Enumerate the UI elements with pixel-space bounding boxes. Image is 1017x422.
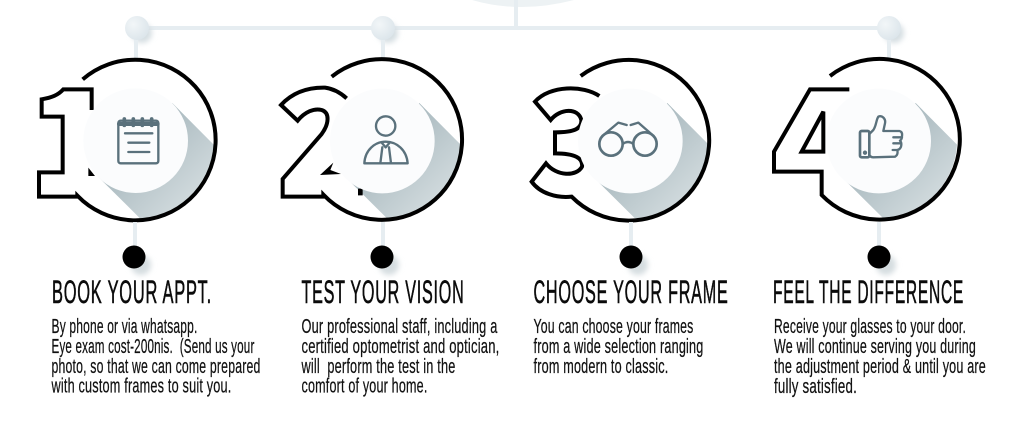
heading: test your vision: TEST YOUR VISION <box>302 274 464 310</box>
text: step 2 description <box>301 316 500 398</box>
inner disc <box>83 88 188 193</box>
step 2 badge <box>281 59 462 220</box>
step 1 badge <box>39 60 216 220</box>
step 3 badge <box>532 60 709 221</box>
marker: step 3 dot <box>620 222 648 275</box>
numeral inner detail <box>320 163 363 195</box>
text: step 4 description: fully satisfied. <box>774 376 857 398</box>
numeral inner triangle <box>802 112 823 152</box>
outer ring and numeral 2 <box>281 59 462 220</box>
text: step 2 description: certified optometrist and optician, <box>302 336 500 358</box>
text: step 1 description: photo, so that we can come prepared <box>52 356 260 378</box>
text: step 3 description: from a wide selection ranging <box>534 336 704 358</box>
marker: step 4 dot <box>868 222 896 275</box>
text: step 1 description: Eye exam cost-200nis. (Send us your <box>52 336 255 358</box>
inner disc <box>826 89 931 193</box>
long shadow <box>98 103 214 218</box>
top decorative connector <box>137 0 889 30</box>
text: step 3 description: from modern to classic. <box>534 356 668 378</box>
icon: notepad <box>118 119 158 163</box>
long shadow <box>842 103 957 218</box>
text: step 2 description: comfort of your home. <box>302 376 428 398</box>
outer ring and numeral 4 <box>774 59 960 220</box>
text: step 1 description: with custom frames to suit you. <box>51 376 232 398</box>
outer ring and numeral 3 <box>532 60 709 221</box>
text: step 2 description: Our professional staff, including a <box>302 316 498 338</box>
long shadow <box>345 103 461 218</box>
inner disc <box>578 89 683 193</box>
heading: choose your frame: CHOOSE YOUR FRAME <box>534 274 728 310</box>
text: step 1 description: By phone or via whatsapp. <box>52 316 198 338</box>
node: step 4 connector <box>877 16 904 58</box>
text: step 3 description <box>534 316 704 378</box>
marker: step 2 dot <box>370 222 399 275</box>
text: step 3 description: You can choose your frames <box>534 316 694 338</box>
icon: glasses <box>599 123 657 156</box>
node: step 1 connector <box>125 16 152 58</box>
numeral inner detail <box>88 168 95 176</box>
long shadow <box>593 103 709 218</box>
marker: step 1 dot <box>122 222 151 275</box>
outer ring and numeral 1 <box>39 60 216 220</box>
step 4 badge <box>774 59 960 220</box>
text: step 4 description <box>774 316 986 398</box>
icon: thumbs up <box>860 116 902 157</box>
text: step 2 description: will perform the test in the <box>301 356 456 378</box>
inner disc <box>330 89 435 193</box>
node: step 2 connector <box>371 16 398 58</box>
text: step 1 description <box>51 316 261 398</box>
heading: book your appt: BOOK YOUR APPT. <box>52 274 212 310</box>
icon: person with tie <box>364 116 408 163</box>
